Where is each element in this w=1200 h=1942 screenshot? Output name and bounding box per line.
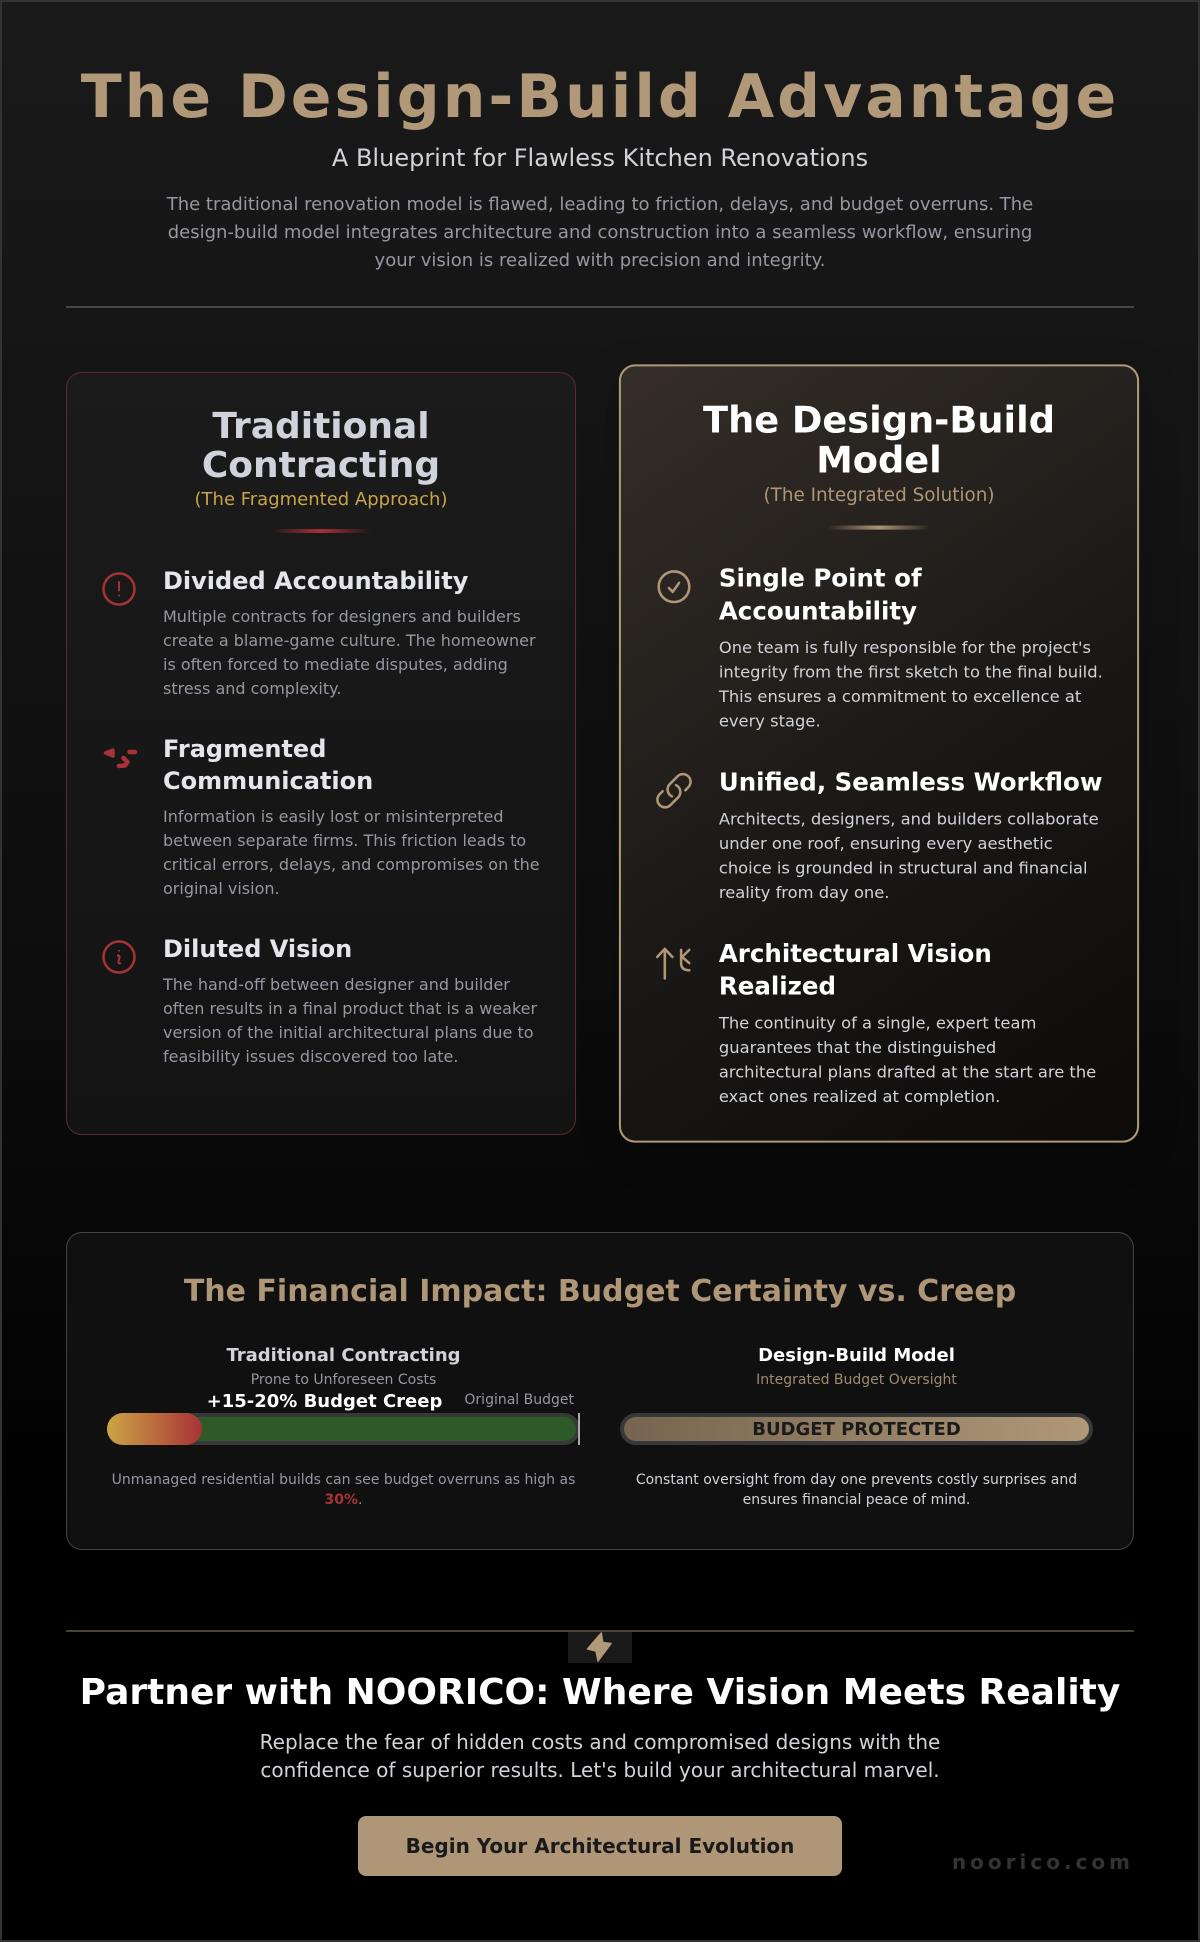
subtitle: A Blueprint for Flawless Kitchen Renovations <box>332 144 868 172</box>
budget creep label: +15-20% Budget Creep <box>207 1391 442 1412</box>
feature: diluted vision: often results in a final product that is a weaker <box>163 999 537 1018</box>
feature: divided accountability: is often forced to mediate disputes, adding <box>163 655 508 674</box>
feature: architectural vision realized <box>656 940 1096 1106</box>
column note: Unmanaged residential builds can see budget overruns as high as <box>112 1472 575 1488</box>
call to action text <box>260 1730 940 1782</box>
call to action text: confidence of superior results. Let's build your architectural marvel. <box>260 1758 940 1782</box>
panel: financial impact <box>66 1232 1134 1550</box>
feature: architectural vision realized: Realized <box>719 973 836 1001</box>
panel heading: The Design-Build <box>703 400 1055 441</box>
feature: unified seamless workflow <box>656 769 1102 902</box>
feature: divided accountability: Divided Accountability <box>163 567 468 595</box>
feature: diluted vision <box>102 935 538 1066</box>
icon: scattered fragments <box>104 748 138 768</box>
feature: architectural vision realized: exact ones realized at completion. <box>719 1087 1000 1106</box>
panel heading: Model <box>816 439 942 481</box>
feature: single point of accountability: integrity from the first sketch to the final build. <box>719 663 1103 682</box>
icon: lightning bolt <box>568 1632 632 1663</box>
panel subheading: (The Integrated Solution) <box>763 484 995 506</box>
call to action button <box>358 1816 842 1876</box>
column note: 30%. <box>325 1492 362 1508</box>
column title: Traditional Contracting <box>226 1345 461 1366</box>
feature: fragmented communication: Fragmented <box>163 735 326 763</box>
feature: fragmented communication: original vision. <box>163 879 280 898</box>
call to action button: Begin Your Architectural Evolution <box>406 1834 794 1858</box>
panel heading <box>703 400 1055 481</box>
feature: fragmented communication: critical errors, delays, and compromises on the <box>163 855 540 874</box>
icon: chain link <box>656 772 692 809</box>
feature: diluted vision: The hand-off between designer and builder <box>163 975 510 994</box>
intro text: The traditional renovation model is flawed, leading to friction, delays, and budget overruns. The <box>167 194 1033 215</box>
protected budget bar <box>620 1413 1093 1445</box>
feature: unified seamless workflow: reality from day one. <box>719 883 890 902</box>
icon: information circle <box>102 940 136 974</box>
feature: fragmented communication <box>104 735 540 898</box>
column note: Constant oversight from day one prevents costly surprises and <box>636 1472 1077 1488</box>
feature: unified seamless workflow: Unified, Seamless Workflow <box>719 769 1102 797</box>
call to action text: Replace the fear of hidden costs and compromised designs with the <box>260 1730 940 1754</box>
website label: noorico.com <box>952 1850 1134 1874</box>
original budget label: Original Budget <box>464 1392 574 1408</box>
feature: architectural vision realized: guarantees that the distinguished <box>719 1038 996 1057</box>
icon: check circle <box>657 570 691 604</box>
financial heading: The Financial Impact: Budget Certainty vs. Creep <box>184 1274 1016 1309</box>
intro text: design-build model integrates architecture and construction into a seamless workflow, ensuring <box>168 222 1032 243</box>
column note: ensures financial peace of mind. <box>743 1492 970 1508</box>
icon: rising arrow and mark <box>656 948 691 980</box>
feature: single point of accountability: One team is fully responsible for the project's <box>719 638 1091 658</box>
feature: architectural vision realized: architectural plans drafted at the start are the <box>719 1063 1096 1082</box>
feature: divided accountability <box>102 567 536 698</box>
feature: diluted vision: feasibility issues discovered too late. <box>163 1047 458 1066</box>
intro text <box>166 194 1033 271</box>
feature: unified seamless workflow: choice is grounded in structural and financial <box>719 859 1088 878</box>
budget bar <box>107 1413 580 1445</box>
creep segment <box>107 1413 202 1445</box>
panel heading <box>202 406 440 486</box>
feature: diluted vision: Diluted Vision <box>163 935 352 963</box>
panel: traditional contracting <box>66 372 576 1135</box>
feature: architectural vision realized: The continuity of a single, expert team <box>719 1014 1036 1033</box>
panel heading: Contracting <box>202 444 440 486</box>
panel: design-build model <box>619 364 1139 1143</box>
icon: exclamation circle <box>102 572 136 606</box>
feature: single point of accountability: This ensures a commitment to excellence at <box>719 687 1081 707</box>
column subtitle: Prone to Unforeseen Costs <box>251 1372 436 1388</box>
title: The Design-Build Advantage <box>81 62 1119 132</box>
feature: divided accountability: stress and complexity. <box>163 679 341 698</box>
column title: Design-Build Model <box>758 1345 955 1366</box>
feature: divided accountability: create a blame-game culture. The homeowner <box>163 631 536 650</box>
feature: unified seamless workflow: Architects, designers, and builders collaborate <box>719 810 1099 829</box>
traditional budget column <box>107 1345 580 1508</box>
column note <box>636 1472 1077 1508</box>
column subtitle: Integrated Budget Oversight <box>756 1372 957 1388</box>
feature: single point of accountability <box>657 565 1103 731</box>
column note <box>112 1472 575 1508</box>
feature: fragmented communication: between separate firms. This friction leads to <box>163 831 526 850</box>
feature: architectural vision realized: Architectural Vision <box>719 940 992 969</box>
feature: single point of accountability: every stage. <box>719 712 821 731</box>
feature: unified seamless workflow: under one roof, ensuring every aesthetic <box>719 834 1053 853</box>
feature: fragmented communication: Information is easily lost or misinterpreted <box>163 807 504 826</box>
feature: fragmented communication: Communication <box>163 767 373 795</box>
intro text: your vision is realized with precision and integrity. <box>375 250 825 271</box>
panel heading: Traditional <box>212 406 430 446</box>
feature: single point of accountability: Accountability <box>719 597 917 626</box>
call to action heading: Partner with NOORICO: Where Vision Meets Reality <box>80 1672 1120 1713</box>
design-build budget column <box>620 1345 1093 1508</box>
original budget marker <box>578 1413 580 1445</box>
protected budget bar: BUDGET PROTECTED <box>752 1419 961 1440</box>
feature: diluted vision: version of the initial architectural plans due to <box>163 1023 534 1042</box>
feature: single point of accountability: Single Point of <box>719 565 922 593</box>
feature: divided accountability: Multiple contracts for designers and builders <box>163 607 521 626</box>
panel subheading: (The Fragmented Approach) <box>195 488 447 510</box>
